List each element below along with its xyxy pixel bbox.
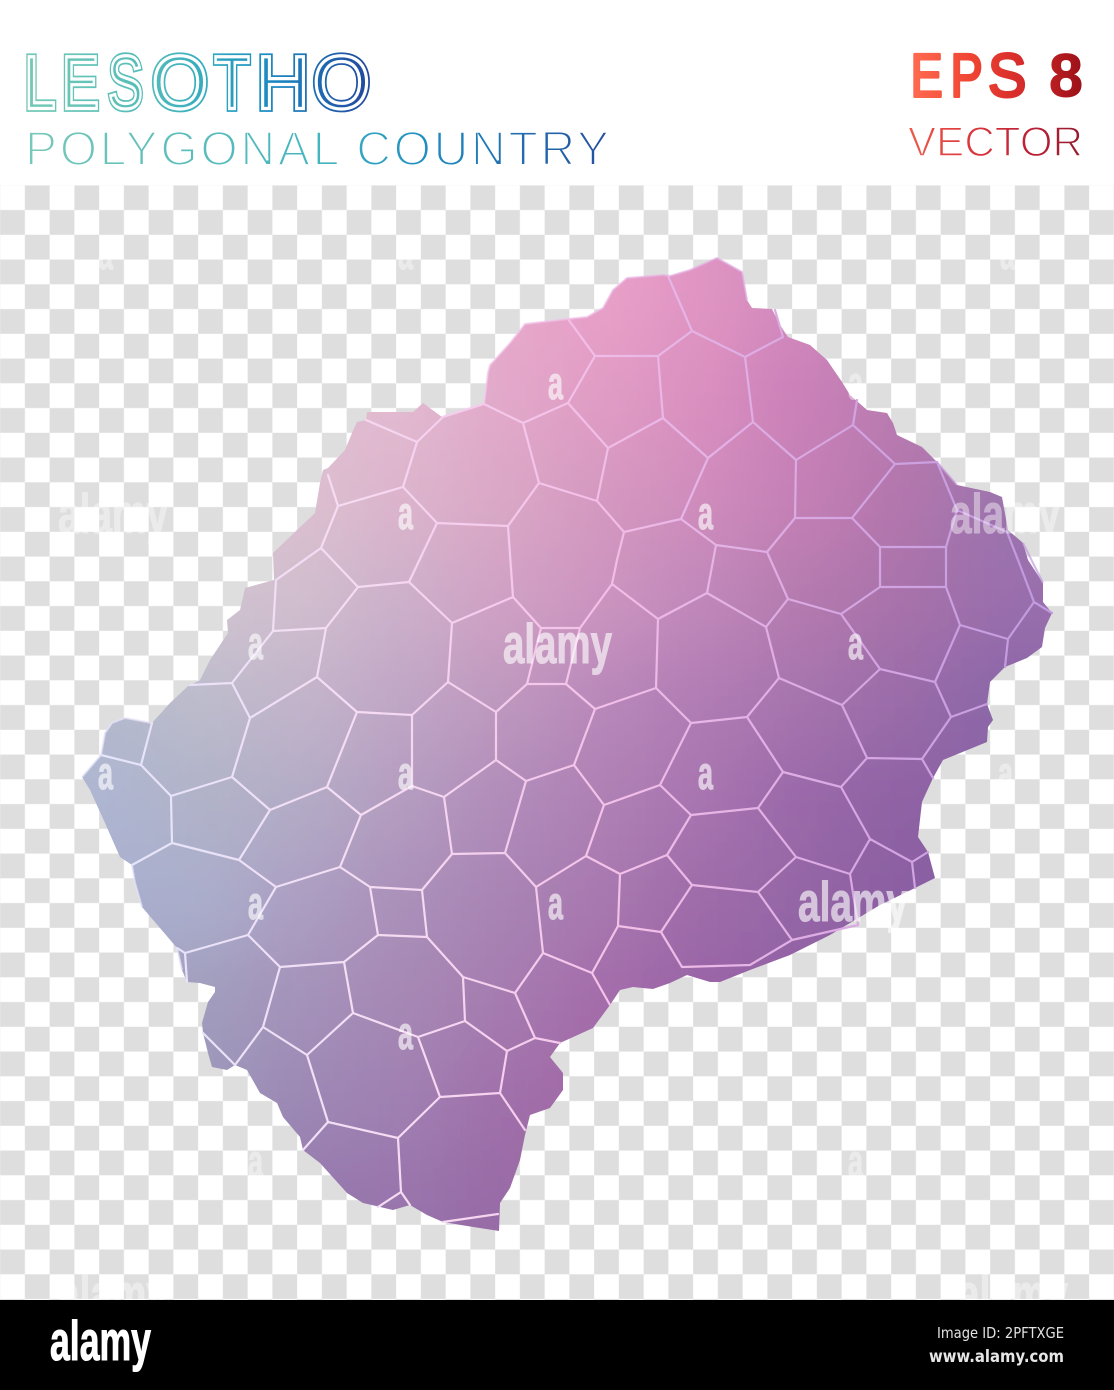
faint stock watermarks: a (398, 747, 413, 799)
footer bar (0, 1300, 1114, 1390)
badge: EPS 8 (910, 42, 1083, 110)
title: LESOTHO: O (152, 40, 208, 124)
footer url: www.alamy.com (929, 1347, 1064, 1366)
faint stock watermarks: alamy (798, 870, 908, 933)
badge: VECTOR: VECTOR (908, 118, 1083, 165)
subtitle: POLYGONAL COUNTRY: POLYGONAL COUNTRY (25, 123, 609, 176)
polygon cell edges (101, 276, 1052, 1222)
faint stock watermarks: a (848, 357, 863, 409)
map outline glow (82, 258, 1043, 970)
badge: VECTOR: VECTOR (908, 118, 1083, 165)
faint stock watermarks: a (998, 747, 1013, 799)
faint stock watermarks: alamy (503, 612, 612, 675)
faint stock watermarks: alamy (58, 482, 168, 545)
faint stock watermarks: a (848, 617, 863, 669)
subtitle: POLYGONAL COUNTRY: POLYGONAL COUNTRY (25, 123, 609, 176)
title: LESOTHO: E (62, 40, 99, 124)
title: LESOTHO: S (108, 40, 143, 124)
faint stock watermarks: a (248, 877, 263, 929)
title: LESOTHO: T (214, 40, 250, 124)
title: LESOTHO: S (108, 40, 143, 124)
faint stock watermarks: a (98, 227, 113, 279)
title: LESOTHO: O (313, 40, 370, 124)
title: LESOTHO: T (214, 40, 250, 124)
title: LESOTHO: E (62, 40, 99, 124)
title: LESOTHO: L (24, 40, 56, 124)
faint stock watermarks: a (698, 487, 713, 539)
title: LESOTHO: O (152, 40, 208, 124)
badge: EPS 8: P (950, 42, 983, 110)
faint stock watermarks: alamy (58, 1262, 168, 1325)
faint stock watermarks: a (98, 747, 113, 799)
title: LESOTHO: H (257, 40, 309, 124)
faint stock watermarks: a (848, 1135, 863, 1187)
badge: EPS 8: S (988, 42, 1026, 110)
faint stock watermarks: a (548, 357, 563, 409)
faint stock watermarks: a (248, 1135, 263, 1187)
faint stock watermarks: alamy (950, 482, 1060, 545)
faint stock watermarks: a (248, 617, 263, 669)
faint stock watermarks: a (698, 747, 713, 799)
faint stock watermarks (58, 227, 1068, 1325)
faint stock watermarks: a (1000, 227, 1015, 279)
badge: EPS 8: 8 (1049, 42, 1083, 110)
faint stock watermarks: a (548, 877, 563, 929)
title: LESOTHO (24, 40, 370, 124)
title: LESOTHO: O (313, 40, 370, 124)
faint stock watermarks: a (398, 227, 413, 279)
faint stock watermarks: a (398, 487, 413, 539)
footer image id: Image ID: 2PFTXGE (937, 1324, 1064, 1342)
faint stock watermarks: a (398, 1007, 413, 1059)
title: LESOTHO: L (24, 40, 56, 124)
map colour fill (82, 258, 1052, 1231)
title: LESOTHO: H (257, 40, 309, 124)
map: Lesotho polygonal mosaic (82, 257, 1054, 1231)
footer logo: alamy: alamy (50, 1309, 151, 1372)
badge: EPS 8: E (910, 42, 943, 110)
faint stock watermarks: alamy (958, 1262, 1068, 1325)
